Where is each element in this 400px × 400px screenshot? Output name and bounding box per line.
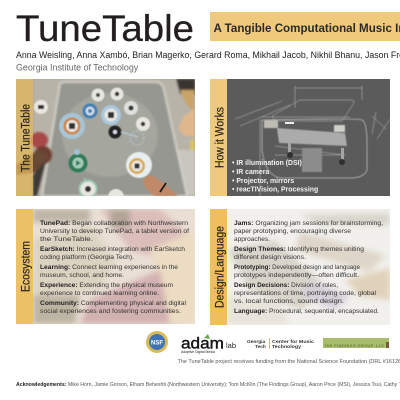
gold strip xyxy=(210,79,227,196)
ecosystem text: Experience: Extending the physical museum xyxy=(40,282,173,289)
panel: how it works xyxy=(210,79,390,196)
bullet list: • reacTIVision, Processing xyxy=(232,186,318,194)
logo: adam lab: adam xyxy=(181,336,224,352)
logo: georgia tech center for music technology: Georgia xyxy=(247,339,265,345)
bullet list: • IR illumination (DSI) xyxy=(232,160,302,167)
left hand and red token xyxy=(16,132,52,196)
ecosystem text: museum, school, and home. xyxy=(40,272,124,279)
projector xyxy=(264,120,278,128)
ecosystem text: Community: Complementing physical and digital xyxy=(40,300,187,307)
ecosystem text: University to develop TunePad, a tablet version of xyxy=(40,228,189,235)
bullet list xyxy=(232,160,318,194)
gold strip xyxy=(210,209,227,325)
gold strip xyxy=(16,209,33,324)
design language text: vs. local functions, sound design. xyxy=(234,298,344,305)
logo: georgia tech center for music technology xyxy=(247,338,314,350)
design language text: Design Decisions: Division of roles, xyxy=(234,282,338,289)
logo: the findings group xyxy=(323,338,389,348)
background photo of wooden blocks xyxy=(227,213,390,325)
logo: adam lab: lab xyxy=(226,341,236,350)
bullet list: • Projector, mirrors xyxy=(232,178,294,185)
design language text: Language: Procedural, sequential, encapsulated. xyxy=(234,308,379,315)
table tokens xyxy=(34,88,152,205)
ecosystem text: Learning: Connect learning experiences in the xyxy=(40,264,178,271)
design language text: Prototyping: Developed design and language xyxy=(234,264,360,271)
panel label: The TuneTable xyxy=(20,104,32,172)
design language text: prototypes independently—often difficult. xyxy=(234,272,359,279)
panel label: How it Works xyxy=(214,107,226,168)
title: TuneTable xyxy=(16,7,194,49)
table top plane xyxy=(277,128,347,146)
subtitle banner xyxy=(210,12,400,41)
design language text: different design visions. xyxy=(234,254,306,261)
panel: ecosystem xyxy=(16,209,195,324)
ecosystem text: TunePad: Began collaboration with Northwestern xyxy=(40,220,188,227)
ecosystem text: EarSketch: Increased integration with EarSketch xyxy=(40,246,185,253)
panel label: Design/Language xyxy=(214,226,226,308)
affiliation: Georgia Institute of Technology xyxy=(16,62,139,72)
ecosystem text: coding platform (Georgia Tech). xyxy=(40,254,134,261)
logo: georgia tech center for music technology: Center for Music xyxy=(272,339,314,345)
background photo xyxy=(33,209,195,324)
design language text: paper prototyping, encouraging diverse xyxy=(234,228,351,235)
gold strip xyxy=(16,79,33,196)
logo: adam lab: Adaptive Digital Media xyxy=(181,350,215,354)
logo: NSF xyxy=(146,331,168,353)
ecosystem text: the TuneTable. xyxy=(40,236,93,243)
logo: georgia tech center for music technology: Tech xyxy=(255,344,266,350)
design language text: Design Themes: Identifying themes uniting xyxy=(234,246,364,253)
logo: NSF: NSF xyxy=(151,340,163,346)
panel: the tunetable photo xyxy=(16,79,195,205)
ecosystem text: experience to continued learning online. xyxy=(40,290,159,297)
computer box xyxy=(302,148,322,172)
design language text xyxy=(234,220,383,315)
table legs xyxy=(287,142,345,165)
acknowledgements: Acknowledgements: Mike Horn, Jamie Gorson, Elham Beheshti (Northwestern University); Tom McKlin (The Findings Group), Aaron Price (MSI), Jessica Tsui, Cathy Tran xyxy=(16,382,400,388)
panel: design language xyxy=(210,209,390,325)
diagram of table xyxy=(235,86,390,196)
design language text: Jams: Organizing jam sessions for brainstorming, xyxy=(234,220,383,227)
bullet list: • IR camera xyxy=(232,169,269,176)
ecosystem text: social experiences and fostering communities. xyxy=(40,308,181,315)
design language text: approaches. xyxy=(234,236,270,243)
panel label: Ecosystem xyxy=(20,241,32,292)
right hand with wristband xyxy=(143,176,178,196)
design language text: representations of time, portraying code, global xyxy=(234,290,377,297)
ecosystem text xyxy=(40,220,189,315)
logo: georgia tech center for music technology: Technology xyxy=(272,344,301,350)
logo: the findings group: THE FINDINGS GROUP, LLC xyxy=(324,344,384,348)
logo: adam lab xyxy=(181,334,236,354)
